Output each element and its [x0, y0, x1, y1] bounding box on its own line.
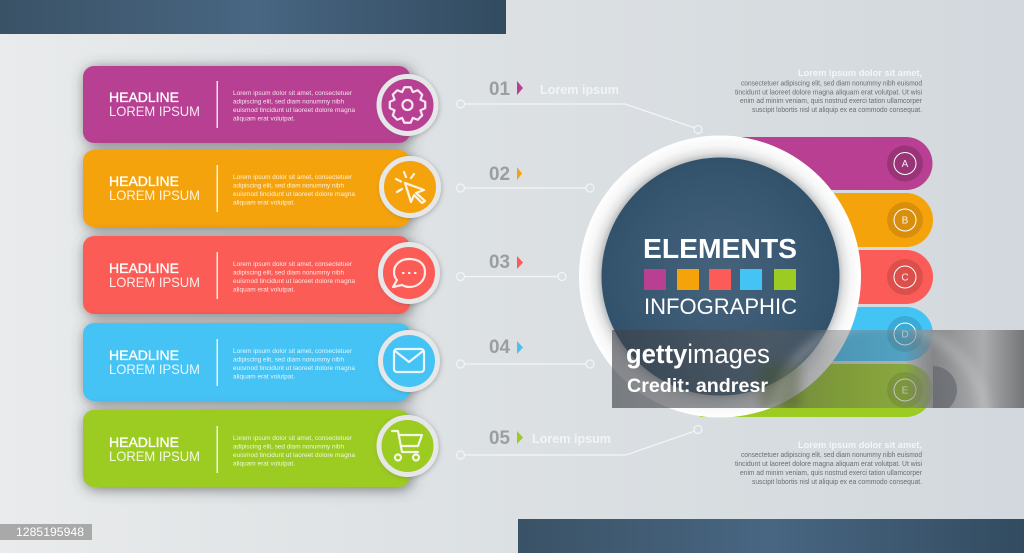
band E: [700, 364, 932, 417]
card 3: chat: euismod tincidunt ut laoreet dolore magna: [233, 278, 355, 285]
text block: lower right: Lorem ipsum dolor sit amet,: [798, 440, 922, 451]
card 3: chat: [83, 236, 438, 314]
text block: lower right: suscipit lobortis nisl ut aliquip ex ea commodo consequat.: [752, 479, 922, 486]
outer white ring: [579, 136, 861, 418]
text block: upper right: [735, 68, 923, 114]
watermark logo: gettyimages: [626, 339, 770, 369]
text block: lower right: tincidunt ut laoreet dolore magna aliquam erat volutpat. Ut wisi: [735, 461, 922, 468]
card 5: cart: Lorem ipsum dolor sit amet, consectetuer: [233, 435, 353, 442]
band D: [700, 307, 933, 361]
image id tag: [0, 524, 92, 540]
card 1: settings: LOREM IPSUM: [109, 103, 200, 119]
bottom banner bar: [518, 519, 1024, 553]
card 3: chat: adipiscing elit, sed diam nonummy nibh: [233, 270, 344, 276]
image id tag: 1285195948: [16, 527, 84, 539]
text block: lower right: consectetuer adipiscing elit, sed diam nonummy nibh euismod: [741, 452, 922, 459]
card 2: click: [83, 150, 438, 227]
connector 04: [456, 337, 594, 368]
card 1: settings: [83, 66, 436, 143]
card 5: cart: HEADLINE: [109, 434, 179, 450]
connector 03: 03: [489, 252, 510, 273]
band C: C: [901, 272, 909, 284]
connector 01: [456, 79, 702, 134]
connector 05: [456, 426, 702, 459]
connector 01: Lorem ipsum: [540, 82, 619, 97]
connector 05: Lorem ipsum: [532, 431, 611, 446]
watermark band: [612, 330, 1024, 408]
card 2: click: aliquam erat volutpat.: [233, 200, 295, 206]
watermark background: [612, 330, 1024, 408]
band A: [700, 137, 932, 190]
card 3: chat: LOREM IPSUM: [109, 274, 200, 290]
card 4: mail: Lorem ipsum dolor sit amet, consectetuer: [233, 348, 353, 355]
panel: numbered connectors: [456, 79, 702, 459]
watermark credit: Credit: andresr: [627, 376, 769, 397]
connector 02: [456, 164, 594, 192]
inner dark disc: [602, 158, 840, 396]
card 5: cart: aliquam erat volutpat.: [233, 460, 295, 468]
card 2: click: adipiscing elit, sed diam nonummy nibh: [233, 182, 344, 190]
card 2: click: LOREM IPSUM: [109, 187, 200, 203]
watermark texture: [755, 330, 990, 408]
card 4: mail: adipiscing elit, sed diam nonummy nibh: [233, 356, 344, 364]
card 3: chat: Lorem ipsum dolor sit amet, consectetuer: [233, 261, 353, 268]
band E: E: [902, 386, 909, 396]
card 2: click: euismod tincidunt ut laoreet dolore magna: [233, 191, 355, 198]
card 5: cart: adipiscing elit, sed diam nonummy nibh: [233, 444, 344, 450]
card 2: click: HEADLINE: [109, 173, 179, 189]
card 5: cart: [83, 410, 436, 487]
text block: upper right: suscipit lobortis nisl ut aliquip ex ea commodo consequat.: [752, 107, 922, 114]
card 1: settings: Lorem ipsum dolor sit amet, consectetuer: [233, 90, 353, 97]
panel: lettered bands: [700, 137, 933, 417]
band C: [700, 250, 933, 304]
panel: headline cards: [83, 66, 438, 487]
card 1: settings: adipiscing elit, sed diam nonummy nibh: [233, 98, 344, 106]
card 5: cart: LOREM IPSUM: [109, 448, 200, 464]
text block: lower right: [735, 440, 923, 486]
title: elements: ELEMENTS: [643, 233, 797, 264]
card 5: cart: euismod tincidunt ut laoreet dolore magna: [233, 452, 355, 459]
text block: upper right: Lorem ipsum dolor sit amet,: [798, 68, 922, 79]
card 4: mail: [83, 323, 438, 401]
connector 04: 04: [489, 337, 510, 358]
card 4: mail: HEADLINE: [109, 347, 179, 363]
band B: [700, 193, 933, 247]
colour swatches: [644, 269, 796, 290]
card 1: settings: euismod tincidunt ut laoreet dolore magna: [233, 107, 355, 114]
card 3: chat: HEADLINE: [109, 260, 179, 276]
card 4: mail: LOREM IPSUM: [109, 361, 200, 377]
card 4: mail: euismod tincidunt ut laoreet dolore magna: [233, 365, 355, 372]
connector 05: 05: [489, 428, 510, 449]
connector 01: 01: [489, 79, 510, 100]
card 3: chat: aliquam erat volutpat.: [233, 286, 295, 294]
card 2: click: Lorem ipsum dolor sit amet, consectetuer: [233, 174, 353, 181]
top banner bar: [0, 0, 506, 34]
card 4: mail: aliquam erat volutpat.: [233, 374, 295, 380]
connector 03: [456, 252, 566, 280]
text block: upper right: consectetuer adipiscing elit, sed diam nonummy nibh euismod: [741, 80, 922, 88]
text block: upper right: enim ad minim veniam, quis nostrud exerci tation ullamcorper: [740, 98, 923, 105]
band D: D: [901, 330, 909, 340]
card 1: settings: aliquam erat volutpat.: [233, 116, 295, 122]
center badge: [579, 136, 861, 418]
connector 02: 02: [489, 164, 510, 185]
band A: A: [902, 159, 909, 170]
text block: lower right: enim ad minim veniam, quis nostrud exerci tation ullamcorper: [740, 470, 923, 477]
subtitle: infographic: INFOGRAPHIC: [644, 294, 797, 319]
text block: upper right: tincidunt ut laoreet dolore magna aliquam erat volutpat. Ut wisi: [735, 90, 922, 96]
band B: B: [902, 216, 909, 226]
card 1: settings: HEADLINE: [109, 89, 179, 105]
